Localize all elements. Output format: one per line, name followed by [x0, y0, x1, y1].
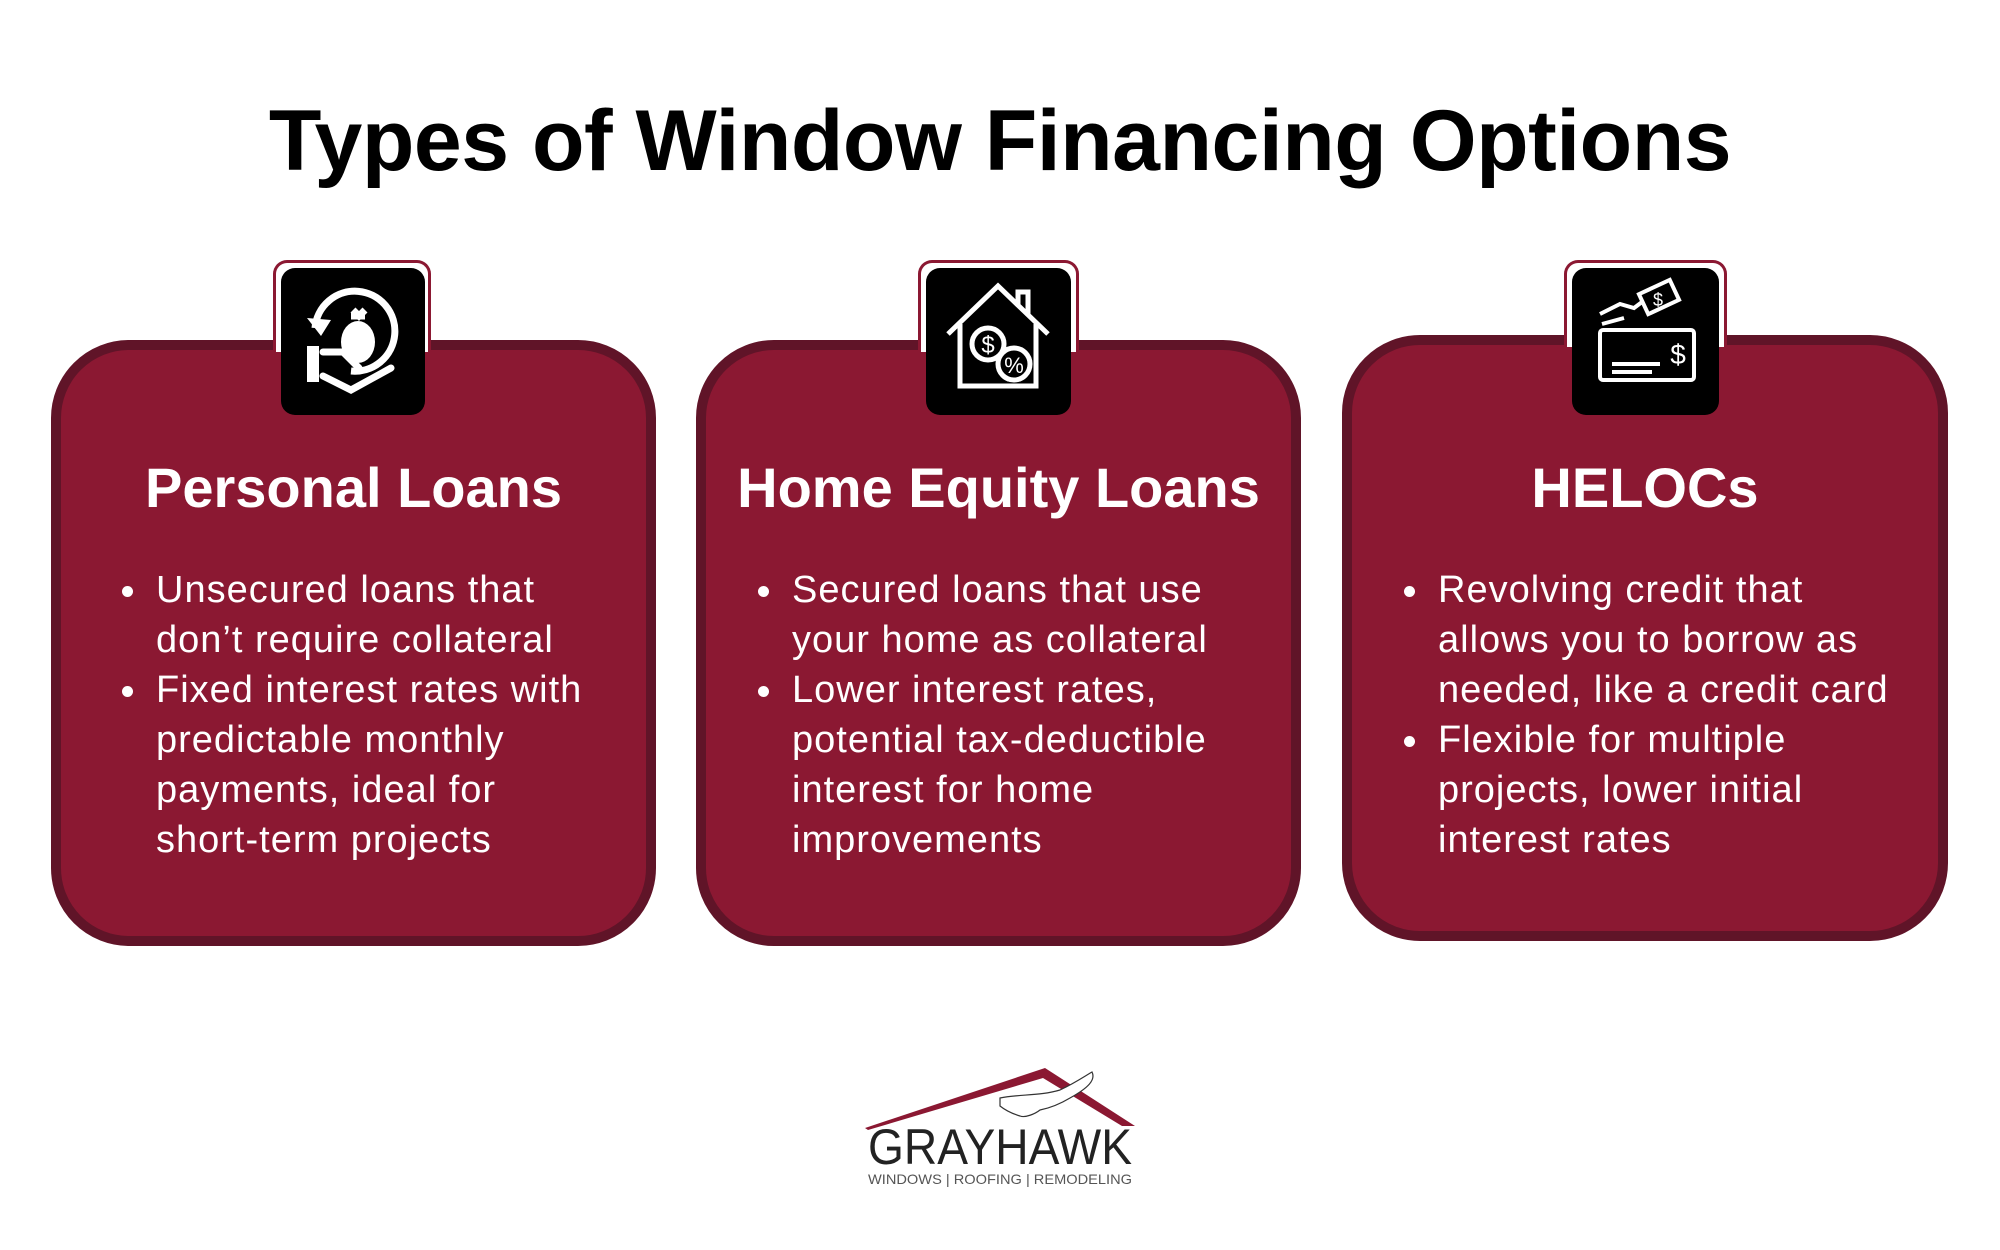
heading: personal loans: Personal Loans — [145, 456, 562, 519]
icon: check and cash in hand: $ — [1653, 290, 1663, 310]
text: home equity bullets: interest for home — [792, 769, 1094, 811]
tab: helocs icon frame — [1564, 260, 1727, 347]
panel: home equity loans — [696, 340, 1301, 946]
text: personal loans bullets: don’t require collateral — [156, 619, 554, 661]
text: helocs bullets: needed, like a credit card — [1438, 669, 1889, 711]
text: home equity bullets: improvements — [792, 819, 1043, 861]
text: helocs bullets: Flexible for multiple — [1438, 719, 1786, 761]
text: home equity bullets: Lower interest rates, — [792, 669, 1157, 711]
text: home equity bullets — [758, 569, 1208, 861]
heading: helocs: HELOCs — [1531, 456, 1759, 519]
text: personal loans bullets: payments, ideal for — [156, 769, 496, 811]
tab: personal loans icon frame — [273, 260, 431, 352]
text: personal loans bullets: Fixed interest rates with — [156, 669, 582, 711]
icon: house with dollar and percent — [926, 268, 1071, 415]
text: home equity bullets: potential tax-deductible — [792, 719, 1207, 761]
text: helocs bullets: projects, lower initial — [1438, 769, 1803, 811]
icon: hawk — [1000, 1072, 1093, 1117]
text: personal loans bullets: short-term projects — [156, 819, 492, 861]
text: helocs bullets: allows you to borrow as — [1438, 619, 1858, 661]
tab: home equity icon frame — [918, 260, 1079, 352]
heading: home equity loans: Home Equity Loans — [737, 456, 1260, 519]
text: home equity bullets: Secured loans that use — [792, 569, 1203, 611]
panel: helocs — [1342, 335, 1948, 941]
text: helocs bullets: Revolving credit that — [1438, 569, 1803, 611]
icon: house with dollar and percent: $ — [981, 332, 995, 359]
text: helocs bullets: interest rates — [1438, 819, 1672, 861]
text: personal loans bullets: Unsecured loans that — [156, 569, 535, 611]
text: helocs bullets — [1404, 569, 1889, 861]
icon: money bag in hand — [281, 268, 425, 415]
panel: personal loans — [51, 340, 656, 946]
text: personal loans bullets: predictable monthly — [156, 719, 505, 761]
text: tagline: WINDOWS | ROOFING | REMODELING — [868, 1171, 1132, 1187]
text: personal loans bullets — [122, 569, 582, 861]
text: home equity bullets: your home as collateral — [792, 619, 1208, 661]
icon: check and cash in hand — [1572, 268, 1719, 415]
icon: check and cash in hand: $ — [1670, 339, 1686, 370]
logo: grayhawk — [865, 1068, 1135, 1187]
icon: house with dollar and percent: % — [1004, 353, 1024, 378]
icon: roof — [865, 1068, 1135, 1130]
title: Types of Window Financing Options — [269, 93, 1731, 189]
